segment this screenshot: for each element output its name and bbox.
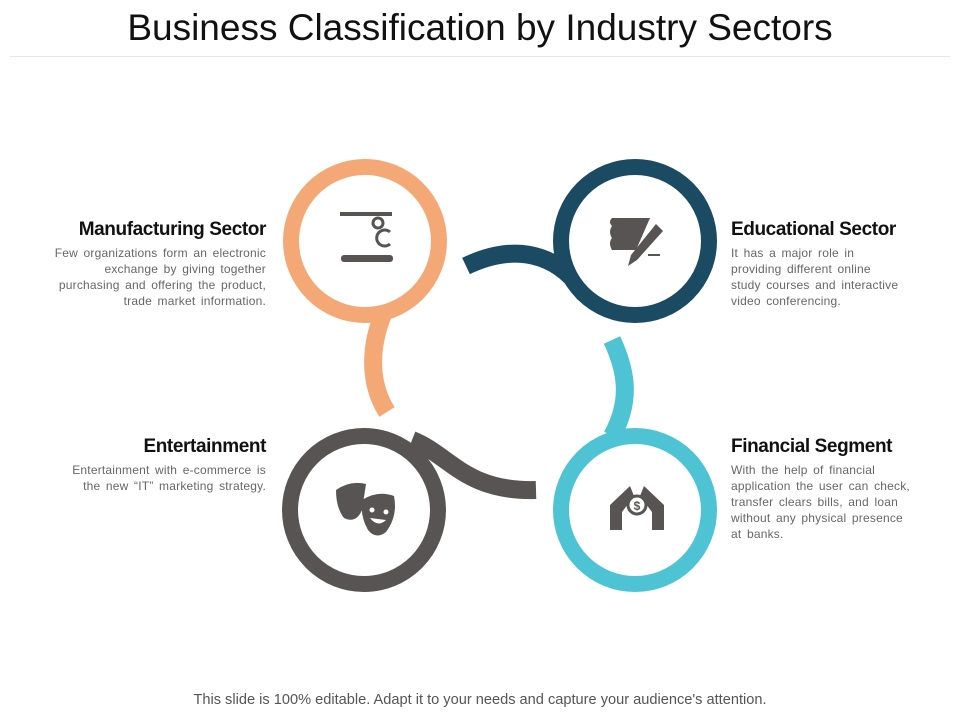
circle: educational	[561, 167, 709, 315]
icon: financial hands with coin: $	[634, 499, 641, 513]
title: Business Classification by Industry Sectors	[127, 7, 833, 48]
icon: financial hands with coin	[610, 486, 664, 530]
text: educational: providing different online	[731, 262, 871, 276]
text: manufacturing: Few organizations form an electronic	[55, 246, 266, 260]
text: educational: video conferencing.	[731, 294, 841, 308]
tail: orange	[373, 312, 387, 412]
text: financial	[731, 436, 910, 541]
text: manufacturing: Manufacturing Sector	[79, 219, 266, 240]
circle: manufacturing	[291, 167, 439, 315]
tail: dark blue	[466, 254, 585, 295]
text: educational	[731, 219, 898, 308]
text: manufacturing	[55, 219, 266, 308]
text: entertainment: Entertainment	[143, 436, 266, 457]
text: educational: study courses and interactive	[731, 278, 898, 292]
text: entertainment: the new “IT” marketing strategy.	[83, 479, 266, 493]
text: financial: With the help of financial	[731, 463, 875, 477]
text: entertainment	[72, 436, 266, 493]
text: financial: transfer clears bills, and loan	[731, 495, 898, 509]
footer: This slide is 100% editable. Adapt it to your needs and capture your audience's attention.	[193, 692, 767, 708]
icon: entertainment masks	[336, 483, 395, 536]
icon: manufacturing robot	[340, 212, 393, 262]
text: manufacturing: purchasing and offering the product,	[59, 278, 266, 292]
text: educational: It has a major role in	[731, 246, 854, 260]
text: entertainment: Entertainment with e-commerce is	[72, 463, 266, 477]
circle: entertainment	[290, 436, 438, 584]
icon: educational book and pencil	[610, 218, 663, 266]
text: financial: without any physical presence	[731, 511, 903, 525]
text: financial: at banks.	[731, 527, 784, 541]
tail: cyan	[612, 340, 625, 436]
text: financial: application the user can check,	[731, 479, 910, 493]
text: manufacturing: trade market information.	[124, 294, 266, 308]
text: manufacturing: exchange by giving together	[104, 262, 266, 276]
text: educational: Educational Sector	[731, 219, 896, 240]
tail: grey	[412, 440, 536, 490]
circle: financial	[561, 436, 709, 584]
text: financial: Financial Segment	[731, 436, 892, 457]
